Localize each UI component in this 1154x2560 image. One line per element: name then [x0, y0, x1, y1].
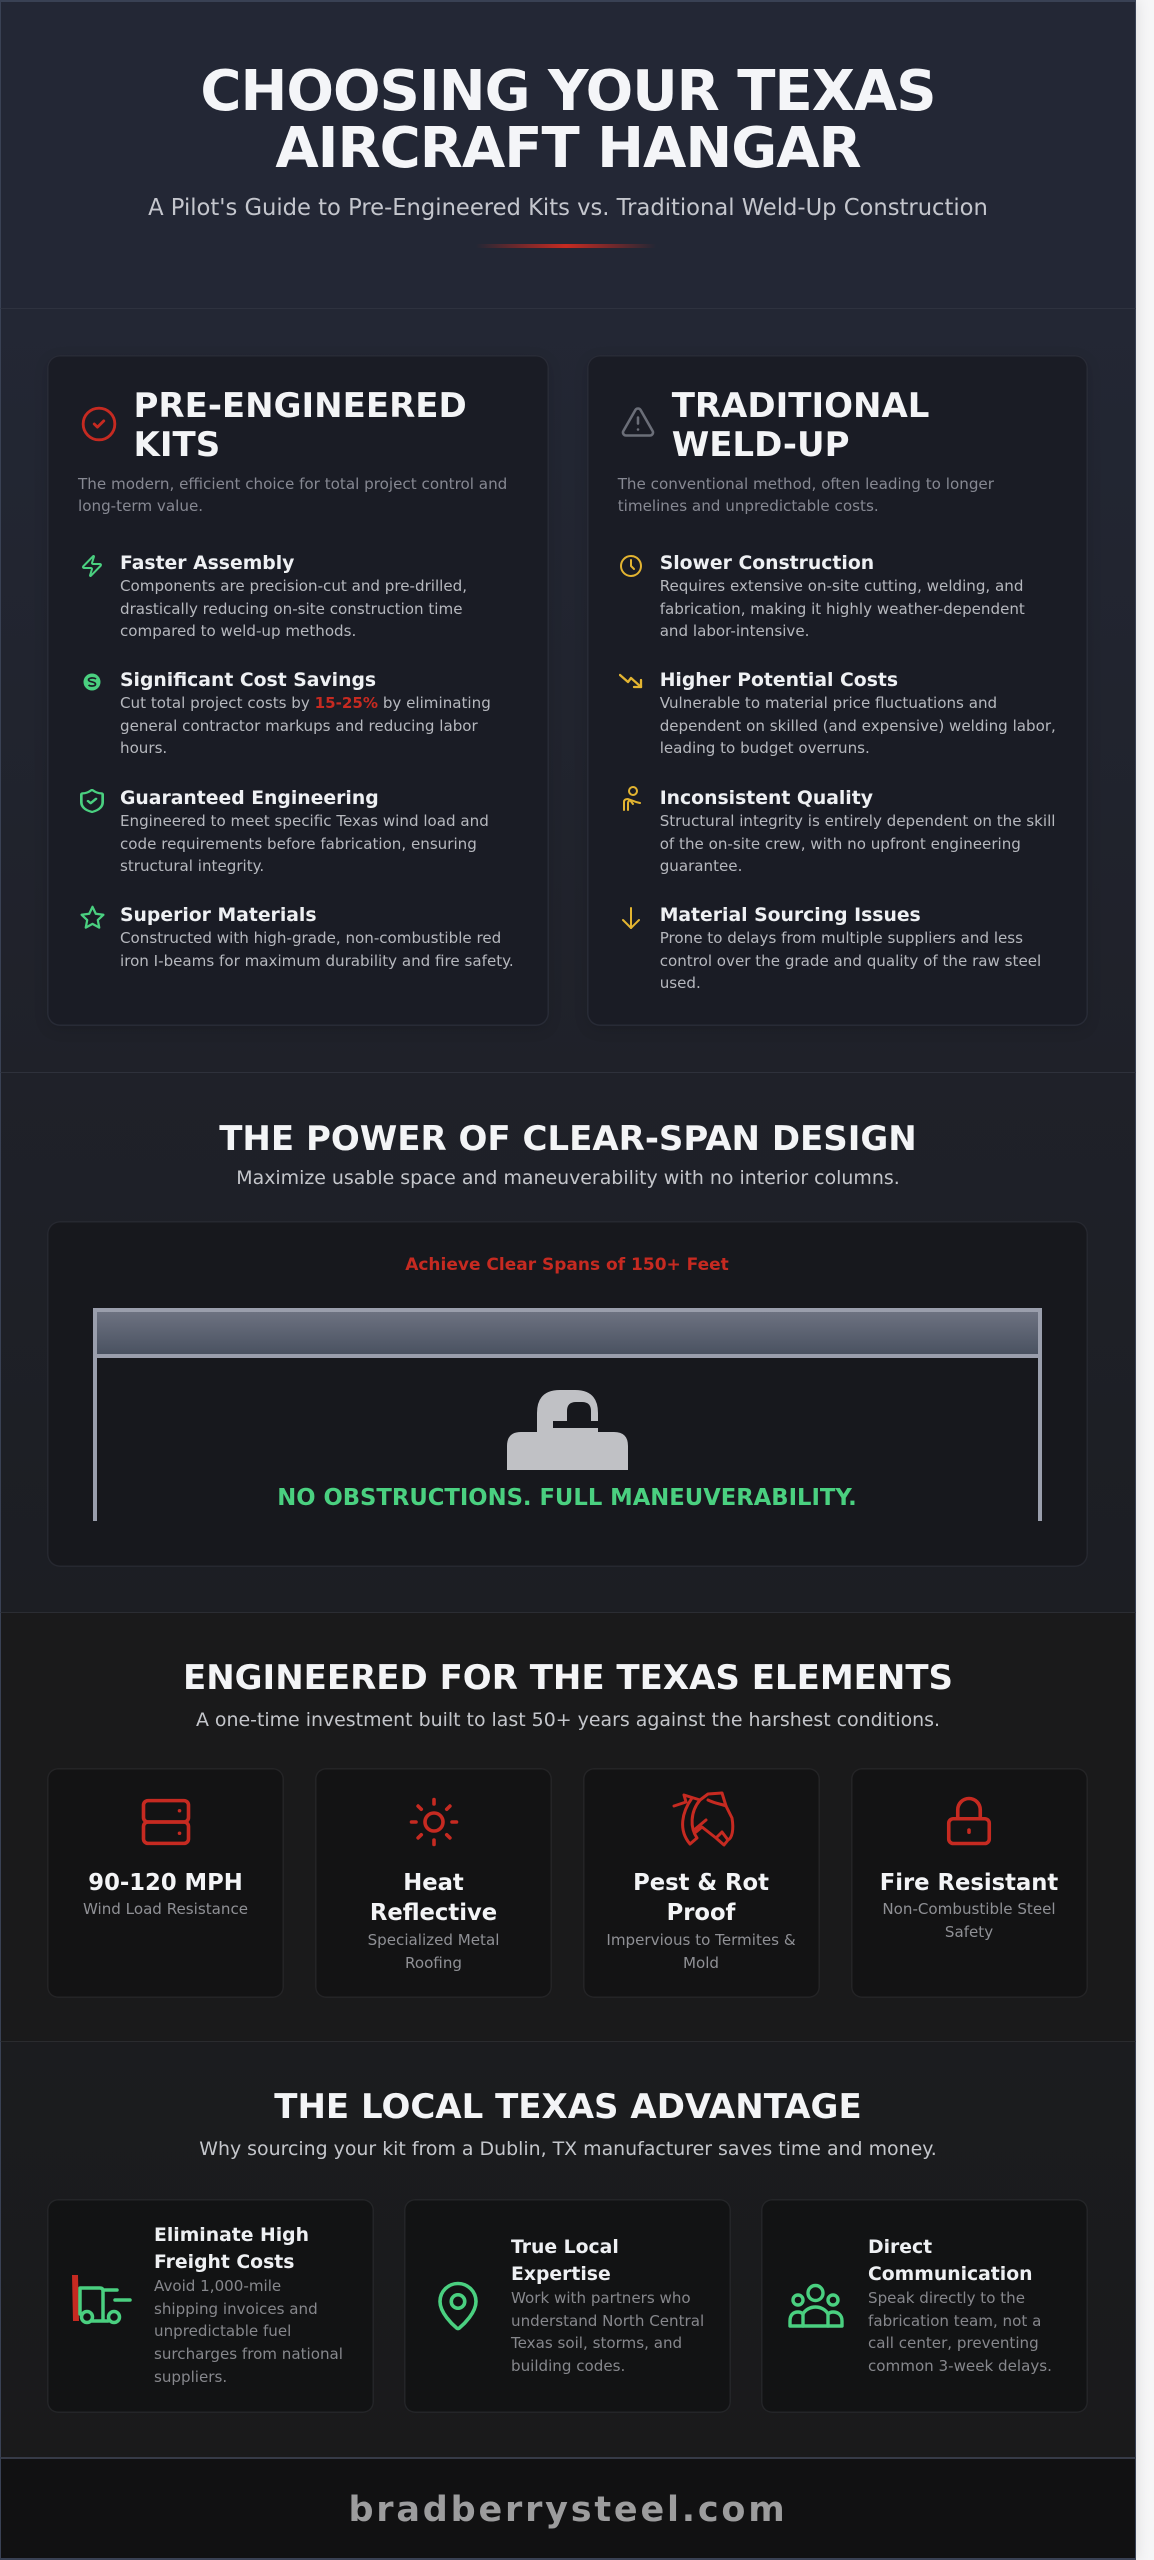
item text: control over the grade and quality of the raw steel: [660, 952, 1041, 970]
item text: fabrication, making it highly weather-dependent: [660, 600, 1025, 618]
card: direct communication: [761, 2199, 1088, 2413]
lead text: [78, 475, 507, 515]
icon: open lock: [507, 1390, 628, 1470]
red accent line: [476, 244, 656, 248]
expertise text: [511, 2234, 704, 2378]
icon: person: [623, 786, 641, 811]
heat reflective text: Reflective: [370, 1900, 497, 1926]
freight text: shipping invoices and: [154, 2300, 318, 2318]
freight text: Avoid 1,000-mile: [154, 2277, 281, 2295]
item title: Significant Cost Savings: [120, 670, 376, 690]
heading: traditional weld-up: [672, 386, 929, 464]
icon: warning triangle: [622, 407, 654, 437]
icon: pest: [672, 1792, 734, 1847]
panel: traditional weld-up: [586, 355, 1088, 1026]
communication text: [868, 2234, 1052, 2378]
pest text: Impervious to Termites &: [606, 1931, 796, 1949]
icon: team: [785, 2280, 847, 2330]
section: header background: [0, 0, 1136, 309]
heading: pre-engineered kits: PRE-ENGINEERED: [134, 386, 467, 426]
communication text: call center, preventing: [868, 2334, 1039, 2352]
title: CHOOSING YOUR TEXAS: [200, 58, 936, 124]
item: guaranteed engineering: [80, 788, 489, 875]
freight text: unpredictable fuel: [154, 2322, 291, 2340]
item text: general contractor markups and reducing labor: [120, 717, 478, 735]
pest text: Proof: [667, 1900, 735, 1926]
heat reflective text: [368, 1870, 499, 1972]
item text: Engineered to meet specific Texas wind load and: [120, 812, 489, 830]
item text: iron I-beams for maximum durability and fire safety.: [120, 952, 514, 970]
communication text: common 3-week delays.: [868, 2357, 1052, 2375]
item title: Inconsistent Quality: [660, 788, 873, 808]
item: superior materials: [80, 904, 514, 970]
icon: coin: [84, 674, 100, 690]
item: higher potential costs: [619, 670, 1056, 757]
subheading: clear-span: Maximize usable space and maneuverability with no interior columns.: [236, 1167, 900, 1189]
communication text: fabrication team, not a: [868, 2312, 1041, 2330]
expertise text: Work with partners who: [511, 2289, 691, 2307]
expertise text: True Local: [511, 2237, 619, 2258]
item text: Cut total project costs by 15-25% by eliminating: [120, 694, 491, 712]
item text: [120, 929, 514, 970]
heading: traditional weld-up: TRADITIONAL: [672, 386, 929, 426]
subtitle: A Pilot's Guide to Pre-Engineered Kits vs. Traditional Weld-Up Construction: [148, 194, 988, 220]
card: heat reflective: [315, 1768, 552, 1998]
card: local expertise: [404, 2199, 731, 2413]
wind load text: Wind Load Resistance: [83, 1900, 248, 1918]
heading: pre-engineered kits: KITS: [134, 424, 220, 464]
communication text: Communication: [868, 2264, 1033, 2285]
icon: trending down: [619, 674, 642, 688]
freight text: Freight Costs: [154, 2252, 294, 2273]
footer url: bradberrysteel.com: [348, 2490, 788, 2530]
fire resistant text: Fire Resistant: [880, 1870, 1058, 1896]
freight text: surcharges from national: [154, 2345, 343, 2363]
heat reflective text: Specialized Metal: [368, 1931, 499, 1949]
item title: Guaranteed Engineering: [120, 788, 379, 808]
subheading: texas elements: A one-time investment built to last 50+ years against the harshest conditions.: [196, 1709, 940, 1731]
panel: pre-engineered kits: [47, 355, 549, 1026]
item: inconsistent quality: [623, 786, 1056, 875]
pest text: Pest & Rot: [633, 1870, 769, 1896]
item text: structural integrity.: [120, 857, 264, 875]
item text: used.: [660, 974, 701, 992]
heat reflective text: Heat: [403, 1870, 464, 1896]
item text: and labor-intensive.: [660, 622, 809, 640]
item text: [660, 694, 1056, 757]
item text: [660, 577, 1025, 640]
icon: lightning: [82, 555, 102, 577]
icon: map pin: [431, 2279, 485, 2333]
item text: Requires extensive on-site cutting, welding, and: [660, 577, 1023, 595]
lead text: The modern, efficient choice for total project control and: [78, 475, 507, 493]
item text: hours.: [120, 739, 167, 757]
expertise text: building codes.: [511, 2357, 625, 2375]
item text: [120, 812, 489, 875]
section: texas elements background: [0, 1612, 1136, 2042]
communication text: Speak directly to the: [868, 2289, 1025, 2307]
item text: of the on-site crew, with no upfront engineering: [660, 835, 1021, 853]
red span label: Achieve Clear Spans of 150+ Feet: [405, 1255, 729, 1275]
heading: traditional weld-up: WELD-UP: [672, 424, 850, 464]
item text: [660, 812, 1056, 875]
heading: local advantage: THE LOCAL TEXAS ADVANTAGE: [274, 2086, 862, 2126]
lead text: timelines and unpredictable costs.: [618, 497, 879, 515]
panel: clear-span diagram: [47, 1221, 1088, 1567]
item title: Slower Construction: [660, 552, 874, 574]
fire resistant text: Non-Combustible Steel: [882, 1900, 1056, 1918]
item text: Constructed with high-grade, non-combustible red: [120, 929, 501, 947]
icon: star: [80, 906, 104, 929]
section: local advantage background: [0, 2042, 1136, 2458]
icon: server: [142, 1798, 190, 1846]
freight text: Eliminate High: [154, 2225, 309, 2246]
item: faster assembly: [82, 552, 467, 640]
green caption: NO OBSTRUCTIONS. FULL MANEUVERABILITY.: [277, 1484, 857, 1510]
card: pest and rot proof: [582, 1768, 820, 1998]
heat reflective text: Roofing: [405, 1954, 462, 1972]
item title: Higher Potential Costs: [660, 670, 898, 690]
card: wind load: [47, 1768, 284, 1998]
expertise text: Texas soil, storms, and: [511, 2334, 682, 2352]
freight text: suppliers.: [154, 2368, 227, 2386]
card: fire resistant: [850, 1768, 1088, 1998]
expertise text: Expertise: [511, 2264, 611, 2285]
icon: circle check: [82, 406, 116, 442]
item title: Faster Assembly: [120, 552, 294, 574]
lead text: long-term value.: [78, 497, 203, 515]
item text: guarantee.: [660, 857, 742, 875]
fire resistant text: [880, 1870, 1058, 1941]
lead text: The conventional method, often leading to longer: [618, 475, 994, 493]
pest text: [606, 1870, 796, 1972]
wind load text: 90-120 MPH: [88, 1870, 243, 1896]
item text: Components are precision-cut and pre-drilled,: [120, 577, 467, 595]
item title: Material Sourcing Issues: [660, 904, 921, 926]
card: freight costs: [47, 2199, 374, 2413]
item title: Superior Materials: [120, 904, 317, 926]
wind load text: [83, 1870, 248, 1918]
title: AIRCRAFT HANGAR: [275, 116, 861, 180]
item: slower construction: [620, 552, 1025, 640]
heading: clear-span design: THE POWER OF CLEAR-SPAN DESIGN: [219, 1118, 917, 1158]
item text: [120, 577, 467, 640]
item text: drastically reducing on-site construction time: [120, 600, 462, 618]
item: material sourcing issues: [622, 904, 1041, 992]
expertise text: understand North Central: [511, 2312, 704, 2330]
item text: compared to weld-up methods.: [120, 622, 356, 640]
hangar frame: [93, 1308, 1042, 1521]
title: [200, 58, 936, 180]
heading: texas elements: ENGINEERED FOR THE TEXAS ELEMENTS: [183, 1658, 953, 1698]
fire resistant text: Safety: [945, 1923, 993, 1941]
footer: [0, 2457, 1136, 2560]
item text: Prone to delays from multiple suppliers and less: [660, 929, 1023, 947]
icon: shield check: [80, 789, 104, 813]
item text: Structural integrity is entirely dependent on the skill: [660, 812, 1056, 830]
item text: [120, 694, 491, 757]
item text: leading to budget overruns.: [660, 739, 870, 757]
section: clear-span background: [0, 1073, 1136, 1612]
item text: dependent on skilled (and expensive) welding labor,: [660, 717, 1056, 735]
item text: code requirements before fabrication, ensuring: [120, 835, 477, 853]
freight text: [154, 2222, 343, 2388]
item: cost savings: [84, 670, 491, 757]
icon: sun: [410, 1798, 458, 1846]
item text: [660, 929, 1041, 992]
icon: truck: [70, 2270, 134, 2330]
roof beam: [93, 1308, 1042, 1358]
heading: pre-engineered kits: [134, 386, 467, 464]
section: comparison background: [0, 309, 1136, 1073]
communication text: Direct: [868, 2237, 932, 2258]
lead text: [618, 475, 994, 515]
icon: arrow down: [622, 907, 640, 929]
icon: lock: [946, 1796, 992, 1846]
icon: clock: [620, 555, 642, 577]
pest text: Mold: [683, 1954, 719, 1972]
item text: Vulnerable to material price fluctuations and: [660, 694, 997, 712]
subheading: local advantage: Why sourcing your kit from a Dublin, TX manufacturer saves time and money.: [199, 2138, 937, 2160]
